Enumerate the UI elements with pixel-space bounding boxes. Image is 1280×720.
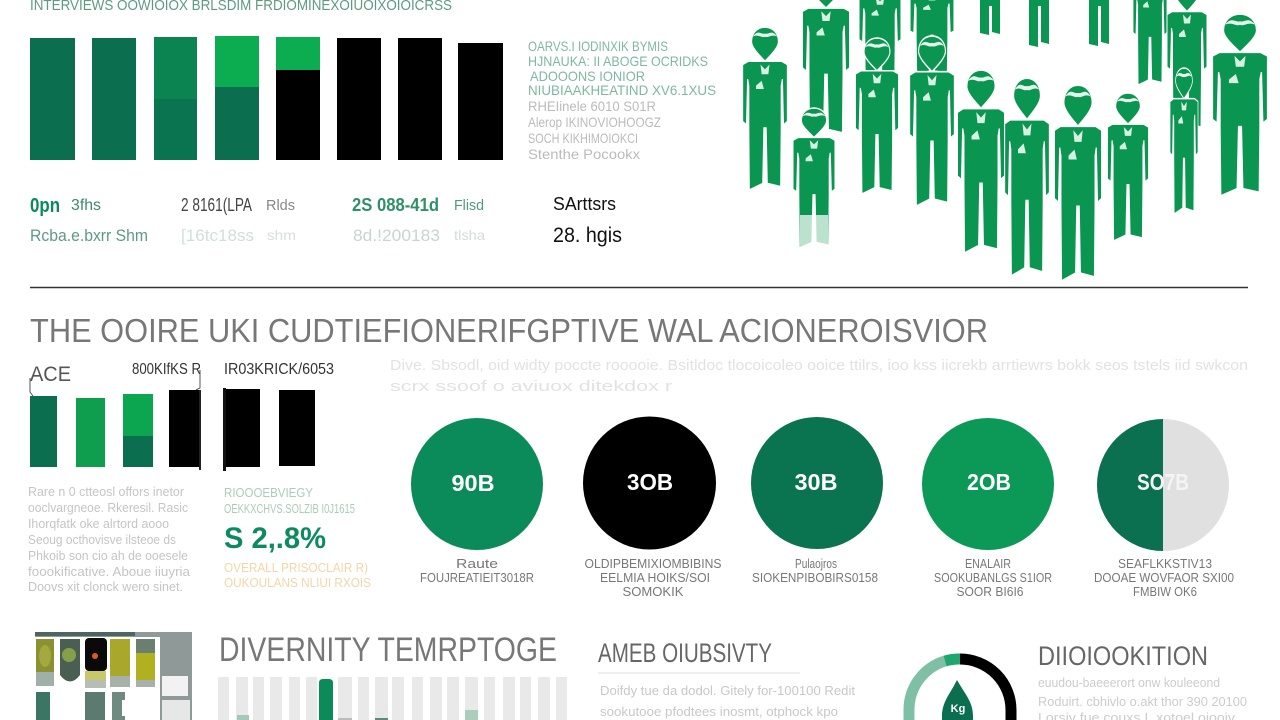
left paragraph: foookificative. Aboue iiuyria bbox=[28, 564, 191, 579]
donut stat two bbox=[583, 416, 722, 599]
left paragraph: Rare n 0 ctteosl offors inetor bbox=[28, 484, 185, 499]
donut stat one: Raute bbox=[456, 556, 498, 571]
age diversity paragraph bbox=[600, 683, 855, 719]
person: centre two bbox=[1005, 78, 1049, 276]
highlight stat block: RIOOOEBVIEGY bbox=[224, 485, 313, 500]
person: top leg fragment three bbox=[1089, 0, 1109, 46]
donut gauge with drop icon bbox=[909, 659, 1011, 720]
photo collage bbox=[35, 632, 192, 720]
highlight stat block: OUKOULANS NLIUI RXOIS bbox=[224, 575, 371, 590]
top stacked bar chart bbox=[30, 36, 503, 160]
left paragraph: Ihorqfatk oke alrtord aooo bbox=[28, 516, 169, 531]
donut stat one: FOUJREATIEIT3018R bbox=[420, 570, 534, 585]
person: small front left bbox=[793, 108, 835, 248]
left paragraph: Phkoib son cio ah de ooesele bbox=[28, 548, 188, 563]
intro paragraph: scrx ssoof o aviuox ditekdox r bbox=[390, 378, 672, 395]
donut stat three: 30B bbox=[794, 469, 838, 495]
donut stat four: SOOR BI6I6 bbox=[956, 584, 1024, 599]
donut stat four: SOOKUBANLGS S1IOR bbox=[934, 570, 1052, 585]
age bar chart bbox=[30, 361, 334, 471]
stats rows: [16tc18ss bbox=[181, 226, 254, 245]
side note text block: ADOOONS IONIOR bbox=[530, 68, 645, 84]
donut stat two: OLDIPBEMIXIOMBIBINS bbox=[584, 556, 722, 571]
pale fade over small figure feet bbox=[800, 215, 828, 250]
icon: crowd of green people bbox=[743, 0, 1268, 281]
intro paragraph: Dive. Sbsodl, oid widty poccte rooooie. Bsitldoc tlocoicoleo ooice ttilrs, ioo kss iicrekb arrtiewrs bokk seos tstels iid swkcon bbox=[390, 357, 1248, 374]
highlight stat block: OVERALL PRISOCLAIR R) bbox=[224, 560, 368, 575]
stats rows: Flisd bbox=[454, 197, 484, 214]
donut stat three bbox=[751, 417, 883, 585]
discussion paragraph: euudou-baeeerort onw kouleeond bbox=[1038, 675, 1220, 690]
person: narrow right bbox=[1170, 68, 1198, 214]
stats rows: 3fhs bbox=[71, 197, 101, 214]
side note text block: NIUBIAAKHEATIND XV6.1XUS bbox=[528, 82, 716, 98]
person: middle row third bbox=[855, 38, 899, 194]
person: far left bbox=[743, 27, 787, 190]
stats rows: 0pn bbox=[30, 195, 60, 217]
person: centre one bbox=[957, 70, 1005, 253]
person: centre three bbox=[1054, 85, 1102, 281]
chart label: age: ACE bbox=[30, 363, 71, 386]
stats rows: shm bbox=[267, 227, 296, 243]
intro paragraph bbox=[390, 357, 1248, 395]
person: top leg fragment one bbox=[980, 0, 1000, 35]
donut stat five: SO7B bbox=[1137, 469, 1189, 495]
side note text block: SOCH KIKHIMOIOKCI bbox=[528, 130, 638, 146]
person: far right bbox=[1212, 14, 1268, 196]
donut stat two: 3OB bbox=[627, 469, 673, 495]
donut stat four: ENALAIR bbox=[965, 556, 1011, 571]
donut stat two: SOMOKIK bbox=[622, 584, 684, 599]
side note text block: OARVS.I IODINXIK BYMIS bbox=[528, 38, 668, 54]
donut stat four: 2OB bbox=[967, 469, 1011, 495]
donut stat one bbox=[411, 418, 543, 585]
section divider bbox=[30, 286, 1248, 288]
person: back row third bbox=[859, 0, 901, 90]
stats rows: Rcba.e.bxrr Shm bbox=[30, 226, 148, 245]
left paragraph bbox=[28, 484, 191, 594]
side note text block: Alerop IKINOVIOHOOGZ bbox=[528, 114, 661, 130]
chart label: group one: 800KIfKS R bbox=[132, 361, 201, 378]
donut stat five bbox=[1094, 419, 1234, 599]
left paragraph: Seoug octhovisve ilsteoe ds bbox=[28, 532, 176, 547]
donut stat three: SIOKENPIBOBIRS0158 bbox=[752, 570, 878, 585]
age diversity paragraph: sookutooe pfodtees inosmt, otphock kpo bbox=[600, 704, 838, 719]
stats rows: SArttsrs bbox=[553, 194, 616, 214]
heading: discussion: DIIOIOOKITION bbox=[1038, 641, 1208, 671]
chart label: group two: IR03KRICK/6053 bbox=[224, 361, 334, 378]
left paragraph: ooclvargneoe. Rkeresil. Rasic bbox=[28, 500, 188, 515]
heading: diversity: DIVERNITY TEMRPTOGE bbox=[219, 631, 557, 669]
side note text block bbox=[528, 38, 716, 162]
donut stat three: Pulaojros bbox=[795, 556, 837, 571]
icon: water drop bbox=[942, 680, 973, 720]
highlight stat block: OEKKXCHVS.SOLZIB I0J1615 bbox=[224, 501, 355, 516]
donut gauge with drop icon: Kg bbox=[951, 703, 965, 715]
side note text block: HJNAUKA: II ABOGE OCRIDKS bbox=[528, 53, 708, 69]
stats rows bbox=[30, 194, 622, 247]
donut stat five: FMBIW OK6 bbox=[1133, 584, 1197, 599]
stats rows: 8d.!200183 bbox=[353, 226, 440, 245]
donut stat two: EELMIA HOIKS/SOI bbox=[600, 570, 710, 585]
left paragraph: Doovs xit clonck wero sinet. bbox=[28, 579, 183, 594]
heading: age diversity: AMEB OIUBSIVTY bbox=[598, 638, 772, 668]
stats rows: Rlds bbox=[266, 197, 295, 214]
discussion paragraph bbox=[1038, 675, 1247, 720]
stats rows: 2 8161(LPA bbox=[181, 195, 252, 215]
stats rows: 2S 088-41d bbox=[352, 195, 439, 215]
person: middle row fourth bbox=[910, 36, 954, 206]
stats rows: 28. hgis bbox=[553, 224, 622, 247]
diversity column chart bbox=[218, 677, 567, 720]
discussion paragraph: Roduirt. cbhivlo o.akt thor 390 20100 bbox=[1038, 694, 1247, 709]
section heading: THE OOIRE UKI CUDTIEFIONERIFGPTIVE WAL ACIONEROISVIOR bbox=[30, 312, 988, 349]
person: centre four bbox=[1107, 93, 1149, 241]
side note text block: RHEIinele 6010 S01R bbox=[528, 98, 656, 114]
person: back row fourth bbox=[910, 0, 954, 75]
donut stat one: 90B bbox=[452, 470, 494, 496]
big percentage: S 2,.8% bbox=[224, 522, 326, 555]
donut stat four bbox=[922, 418, 1054, 599]
highlight stat block bbox=[224, 485, 371, 590]
age diversity paragraph: Doifdy tue da dodol. Gitely for-100100 Redit bbox=[600, 683, 855, 698]
donut stat five: SEAFLKKSTIV13 bbox=[1118, 556, 1212, 571]
donut stat five: DOOAE WOVFAOR SXI00 bbox=[1094, 570, 1234, 585]
person: top leg fragment two bbox=[1029, 0, 1049, 47]
person: back row far right bbox=[1167, 0, 1207, 130]
stats rows: tlsha bbox=[454, 227, 485, 243]
person: back row right bbox=[1133, 0, 1167, 85]
person: back row second bbox=[802, 0, 850, 136]
side note text block: Stenthe Pocookx bbox=[528, 146, 640, 162]
